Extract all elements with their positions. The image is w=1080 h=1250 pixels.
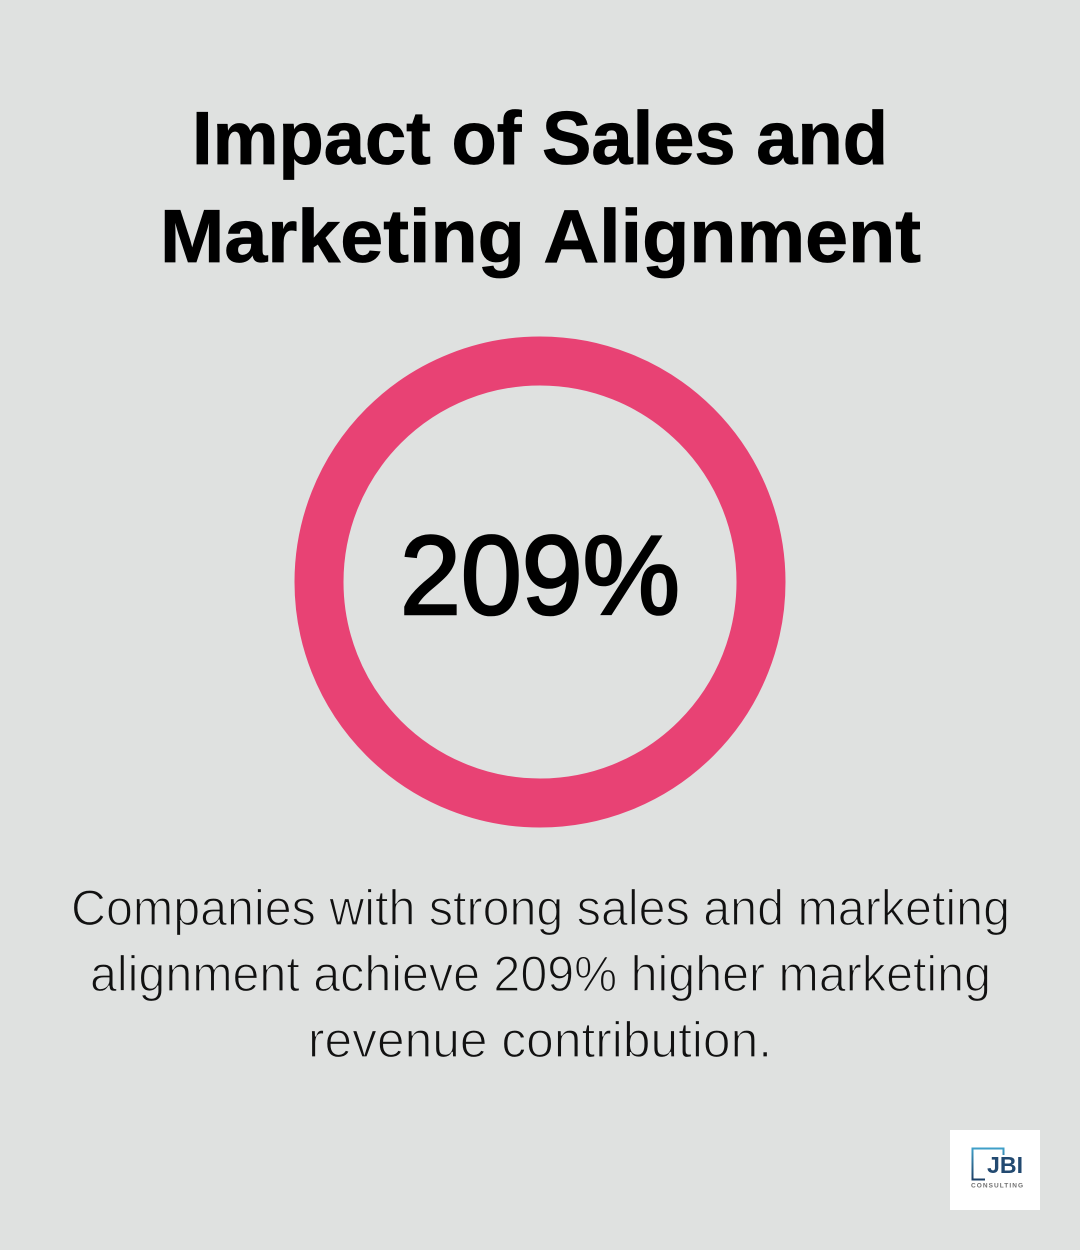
description text [71, 880, 1010, 1068]
title: Impact of Sales and [192, 96, 888, 180]
logo: JBI Consulting: CONSULTING [971, 1182, 1023, 1190]
logo: JBI Consulting [950, 1130, 1040, 1210]
description text: alignment achieve 209% higher marketing [90, 946, 991, 1002]
description text: revenue contribution. [308, 1012, 772, 1068]
title [160, 96, 921, 278]
value: 209% [400, 513, 680, 638]
ring chart: 209% [319, 361, 761, 803]
description text: Companies with strong sales and marketing [71, 880, 1010, 936]
title: Marketing Alignment [160, 194, 921, 278]
logo: JBI Consulting: JBI [987, 1152, 1023, 1178]
